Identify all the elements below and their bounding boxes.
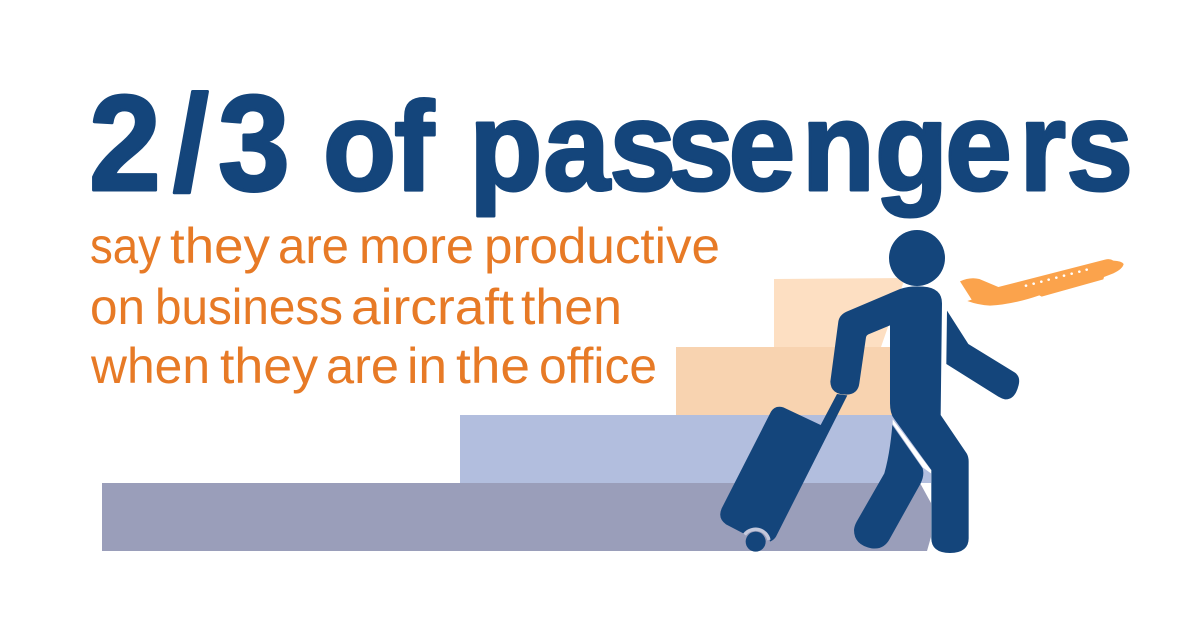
subtitle text block: productive xyxy=(484,218,720,274)
suitcase xyxy=(720,394,847,542)
subtitle text block: in xyxy=(407,338,447,394)
subtitle text block: are xyxy=(326,338,399,394)
subtitle text block: office xyxy=(539,338,657,394)
title: passengers xyxy=(469,77,1133,218)
subtitle text block: say xyxy=(90,218,161,274)
subtitle text block: then xyxy=(521,279,622,335)
subtitle text block: they xyxy=(170,218,270,274)
title: 2/3 xyxy=(89,68,290,220)
subtitle text block: the xyxy=(456,338,530,394)
title: of xyxy=(323,77,435,218)
stair steps xyxy=(102,278,931,551)
icon: traveller with suitcase xyxy=(720,230,1019,553)
subtitle text block: more xyxy=(359,218,474,274)
subtitle text block: aircraft xyxy=(351,279,514,335)
subtitle text block: when xyxy=(90,338,210,394)
subtitle text block xyxy=(90,218,720,394)
subtitle text block: they xyxy=(220,338,318,394)
plane windows xyxy=(1025,268,1088,287)
subtitle text block: are xyxy=(278,218,349,274)
subtitle text block: on xyxy=(90,279,145,335)
icon: airplane xyxy=(960,259,1124,306)
subtitle text block: business xyxy=(155,279,343,335)
